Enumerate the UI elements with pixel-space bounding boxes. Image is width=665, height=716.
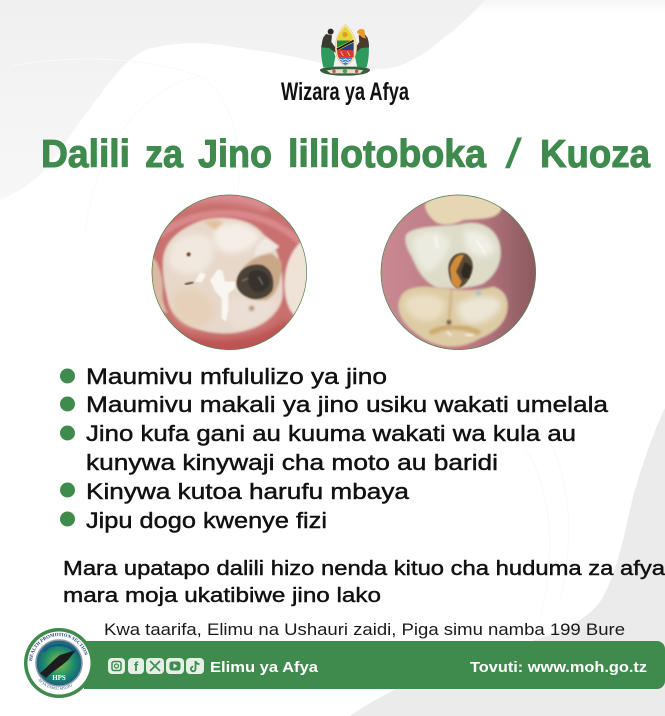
symptom 3 bbox=[60, 421, 576, 475]
badge: Health Promotion Section logo: HPS bbox=[52, 674, 66, 682]
shield bbox=[335, 24, 357, 66]
icon: X bbox=[146, 658, 164, 674]
icon: youtube bbox=[166, 658, 184, 674]
icon: facebook bbox=[128, 658, 144, 674]
icon: instagram bbox=[108, 658, 125, 674]
photo: decayed molar with dark cavity bbox=[152, 194, 307, 350]
badge: Health Promotion Section logo: AFYA TANGU MTOTO bbox=[38, 679, 72, 690]
dark cavity bbox=[237, 265, 273, 299]
photo: molar with open cavity bbox=[380, 194, 536, 350]
contact line: Kwa taarifa, Elimu na Ushauri zaidi, Piga simu namba 199 Bure bbox=[104, 620, 625, 639]
chipped enamel bbox=[255, 238, 279, 257]
molar crown bbox=[163, 218, 283, 333]
footer bar bbox=[84, 641, 665, 689]
advice text: mara moja ukatibiwe jino lako bbox=[63, 584, 381, 607]
icon: facebook: f bbox=[134, 659, 139, 674]
title: lililotoboka bbox=[288, 133, 486, 176]
gum bbox=[162, 218, 298, 334]
symptom 3: Jino kufa gani au kuuma wakati wa kula au bbox=[86, 421, 576, 446]
left figure bbox=[321, 45, 335, 67]
title: Jino bbox=[198, 133, 272, 176]
badge: Health Promotion Section logo: HEALTH PROMOTION SECTION bbox=[28, 632, 88, 661]
emblem: coat of arms of Tanzania bbox=[320, 24, 370, 76]
cavity bbox=[448, 253, 473, 288]
badge: Health Promotion Section logo bbox=[24, 628, 90, 698]
title: za bbox=[145, 133, 183, 176]
right figure bbox=[355, 45, 369, 67]
title: / bbox=[505, 130, 522, 177]
lower tooth bbox=[398, 287, 508, 346]
title bbox=[41, 130, 650, 177]
icon: tiktok bbox=[186, 658, 204, 674]
neighbouring tooth left bbox=[152, 257, 168, 313]
advice text bbox=[63, 557, 665, 607]
ministry name: Wizara ya Afya bbox=[281, 78, 410, 106]
title: Dalili bbox=[41, 133, 130, 176]
symptom 4: Kinywa kutoa harufu mbaya bbox=[86, 479, 410, 504]
title: Kuoza bbox=[540, 133, 650, 176]
middle tooth with cavity bbox=[405, 223, 501, 288]
advice text: Mara upatapo dalili hizo nenda kituo cha huduma za afya bbox=[63, 557, 665, 580]
footer label: website: Tovuti: www.moh.go.tz bbox=[470, 659, 647, 676]
symptom 2: Maumivu makali ya jino usiku wakati umelala bbox=[86, 392, 609, 417]
gum bbox=[382, 202, 536, 349]
symptom 1: Maumivu mfululizo ya jino bbox=[86, 364, 387, 389]
emblem base mound bbox=[320, 67, 370, 76]
symptom list bbox=[60, 364, 609, 533]
symptom 3: kunywa kinywaji cha moto au baridi bbox=[86, 450, 498, 475]
neighbouring tooth right bbox=[283, 241, 306, 316]
upper tooth bbox=[425, 193, 501, 224]
white filling bbox=[195, 269, 235, 322]
footer label: Elimu ya Afya: Elimu ya Afya bbox=[210, 659, 319, 676]
stain around cavity bbox=[237, 253, 282, 300]
symptom 5: Jipu dogo kwenye fizi bbox=[86, 508, 327, 533]
